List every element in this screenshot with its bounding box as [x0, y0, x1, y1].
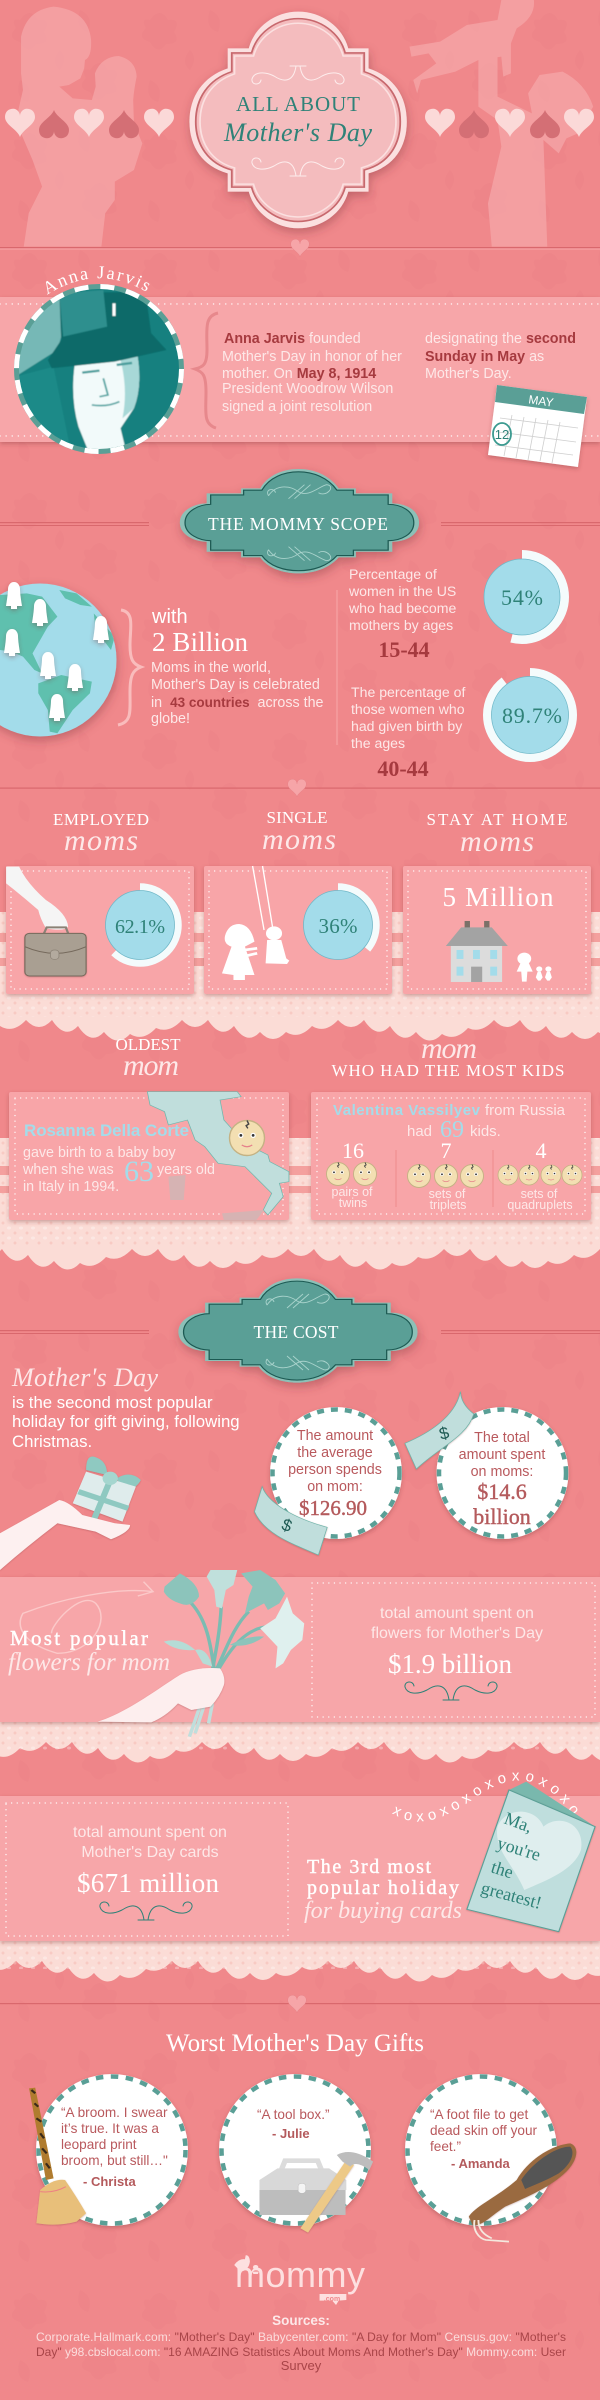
row of hearts right — [425, 109, 594, 138]
callout: amount average person spends: $126.90 — [299, 1496, 367, 1520]
heading: oldest mom: OLDEST — [116, 1035, 181, 1054]
stat: flowers spending: flowers for Mother's Day — [371, 1625, 543, 1642]
Anna Jarvis text: Mother's Day in honor of her — [222, 349, 402, 365]
panel: gift quote Amanda: feet.” — [430, 2139, 461, 2154]
callout: amount average person spends: person spends — [288, 1462, 382, 1478]
lace strip under cards band — [0, 1941, 600, 1982]
text: second most popular holiday: holiday for gift giving, following — [12, 1412, 240, 1431]
section banner: The Cost: THE COST — [254, 1322, 339, 1342]
text: Rosanna Della Corte: 63 — [124, 1155, 154, 1188]
panel: Anna Jarvis band — [0, 266, 600, 470]
text: most popular flowers for mom: Most popular — [10, 1626, 148, 1650]
stat: 54% mothers 15-44 — [348, 554, 564, 662]
text: Rosanna Della Corte: gave birth to a baby boy — [23, 1145, 176, 1161]
icon: dollar bill right — [405, 1392, 474, 1469]
chart: 36% ring — [300, 887, 376, 963]
decorative arrow — [20, 1582, 153, 1653]
heading: mom who had the most kids — [332, 1032, 564, 1080]
text: Valentina Vassilyev — [333, 1102, 566, 1143]
callout: total amount spent on moms: $14.6 — [477, 1479, 527, 1504]
column heading: single moms: moms — [262, 823, 336, 856]
text: Valentina Vassilyev: had — [407, 1123, 432, 1140]
icon: foot file — [469, 2143, 576, 2242]
panel: gift quote Amanda: - Amanda — [451, 2156, 511, 2171]
logo: mommy.com: .com — [324, 2296, 340, 2303]
panel: gift quote Amanda — [405, 2074, 576, 2242]
callout: amount average person spends: the average — [297, 1445, 373, 1461]
card message: greatest! — [479, 1878, 544, 1913]
panel: single moms card — [204, 866, 392, 994]
globe with mom pins — [0, 582, 116, 736]
stat: 89.7% mothers 40-44: those women who — [351, 701, 465, 717]
divider with heart — [0, 779, 600, 797]
icon: dollar bill left: $ — [279, 1515, 295, 1536]
stat: 89.7% mothers 40-44: 89.7% — [502, 703, 562, 728]
Anna Jarvis text — [222, 331, 576, 415]
calendar icon: 12 — [495, 427, 509, 442]
Anna Jarvis text: Mother's Day. — [425, 366, 512, 382]
icon: greeting card — [467, 1782, 595, 1932]
panel: gift quote Amanda: dead skin off your — [430, 2123, 538, 2138]
text: most popular flowers for mom — [8, 1626, 170, 1676]
text: Valentina Vassilyev: from Russia — [485, 1102, 566, 1119]
text: second most popular holiday: is the second most popular — [12, 1393, 213, 1412]
stat: 16 pairs of twins: twins — [339, 1196, 367, 1210]
stat: 4 sets of quadruplets: quadruplets — [507, 1198, 573, 1212]
xoxo arc: xoxoxoxoxoxoxoxoxo — [392, 1772, 578, 1822]
callout: total amount spent on moms: amount spent — [459, 1447, 545, 1463]
sources: Day" y98.cbslocal.com: "16 AMAZING Statistics About Moms And Mother's Day" Mommy.com: User — [36, 2345, 566, 2359]
panel: employed moms card: 62.1% — [115, 916, 165, 938]
column heading: stay at home moms: STAY AT HOME — [426, 810, 568, 829]
sources: Corporate.Hallmark.com: "Mother's Day" Babycenter.com: "A Day for Mom" Census.gov: "Mother's — [36, 2330, 566, 2344]
flourish bottom — [252, 158, 344, 176]
header: mother and baby silhouettes — [18, 0, 593, 247]
calendar icon: MAY — [528, 392, 554, 410]
icon: toolbox and hammer — [259, 2152, 373, 2233]
row of hearts left — [5, 109, 174, 138]
text: 2 billion moms: with — [151, 606, 188, 628]
stat: 7 sets of triplets: 7 — [440, 1138, 452, 1163]
text: second most popular holiday: Mother's Day — [11, 1363, 158, 1392]
stat: 54% mothers 15-44: Percentage of — [349, 566, 437, 582]
callout: total amount spent on moms: on moms: — [471, 1464, 533, 1480]
Anna Jarvis text: designating the second — [425, 331, 576, 347]
icon: dollar bill left — [254, 1487, 327, 1555]
stat: 4 sets of quadruplets: 4 — [536, 1138, 546, 1163]
heading: worst gifts: Worst Mother's Day Gifts — [166, 2030, 424, 2057]
stat: 16 pairs of twins — [326, 1138, 376, 1210]
column heading: single moms — [262, 808, 336, 856]
stat: cards spending: $671 million — [77, 1868, 220, 1898]
panel: popular flowers band — [0, 1570, 600, 1737]
icon: arm with briefcase — [6, 867, 86, 976]
panel: stay at home moms card — [403, 866, 591, 994]
stat: 7 sets of triplets — [408, 1138, 484, 1212]
stat: 89.7% mothers 40-44: the ages — [351, 735, 405, 751]
stat: flowers spending: $1.9 billion — [388, 1649, 512, 1679]
heading: mom who had the most kids: WHO HAD THE MOST KIDS — [332, 1061, 564, 1080]
stat: cards spending: Mother's Day cards — [81, 1844, 219, 1861]
stat: cards spending: total amount spent on — [73, 1824, 227, 1841]
stat: 7 sets of triplets: sets of — [429, 1187, 466, 1201]
text: Valentina Vassilyev: 69 — [440, 1117, 464, 1143]
panel: gift quote Christa: broom, but still…" — [61, 2153, 168, 2168]
Anna Jarvis text: President Woodrow Wilson — [222, 381, 393, 397]
callout: amount average person spends: on mom: — [307, 1479, 363, 1495]
panel: gift quote Christa: “A broom. I swear — [61, 2105, 168, 2120]
text: Rosanna Della Corte: when she was — [22, 1162, 114, 1178]
column heading: employed moms: moms — [64, 824, 138, 857]
panel: oldest mom card — [9, 1092, 289, 1220]
column heading: stay at home moms: moms — [460, 825, 534, 858]
panel: gift quote Christa: - Christa — [83, 2174, 136, 2189]
icon: house and family — [446, 921, 552, 982]
calendar icon — [488, 385, 587, 467]
title text: ALL ABOUT — [236, 92, 360, 116]
text: 3rd most popular holiday: The 3rd most — [307, 1856, 431, 1878]
text: second most popular holiday: Christmas. — [12, 1432, 92, 1451]
Anna Jarvis text: mother. On May 8, 1914 — [222, 366, 376, 382]
icon: baby face — [230, 1120, 264, 1156]
column heading: employed moms — [53, 810, 149, 857]
text: Rosanna Della Corte: years old — [157, 1162, 215, 1178]
stat: cards spending — [73, 1824, 227, 1920]
stat: 54% mothers 15-44: 54% — [501, 585, 543, 610]
icon: hand holding gift — [0, 1456, 141, 1570]
panel: gift quote Christa: it’s true. It was a — [61, 2121, 159, 2136]
logo: mommy.com: mommy — [235, 2254, 365, 2295]
brace right — [118, 610, 141, 725]
stat: 4 sets of quadruplets — [498, 1138, 582, 1212]
lace strip behind mom cards — [0, 912, 600, 1041]
title badge — [189, 12, 407, 228]
card message — [479, 1808, 544, 1913]
stat: flowers spending — [371, 1605, 543, 1700]
sources: Survey — [281, 2358, 322, 2373]
column heading: employed moms: EMPLOYED — [53, 810, 149, 829]
flourish top — [252, 66, 344, 84]
stat: 89.7% mothers 40-44 — [351, 672, 572, 781]
text: Rosanna Della Corte: in Italy in 1994. — [23, 1179, 119, 1195]
stat: 54% mothers 15-44: mothers by ages — [349, 617, 453, 633]
callout: amount average person spends — [270, 1407, 402, 1539]
sources: Sources: — [272, 2313, 330, 2328]
panel: gift quote Julie: - Julie — [272, 2126, 310, 2141]
stat: 16 pairs of twins: 16 — [342, 1138, 364, 1163]
stat: 89.7% mothers 40-44: had given birth by — [351, 718, 463, 734]
panel: most kids card — [311, 1092, 591, 1220]
text: Rosanna Della Corte: Rosanna Della Corte — [24, 1121, 189, 1140]
section banner: The Cost — [0, 1278, 600, 1383]
panel: gift quote Christa: leopard print — [61, 2137, 137, 2152]
text: Valentina Vassilyev: kids. — [470, 1123, 501, 1140]
title script: Mother's Day — [223, 118, 372, 147]
icon: dollar bill right: $ — [437, 1423, 452, 1444]
icon: mother pushing child on swing — [222, 866, 289, 980]
stat: 89.7% mothers 40-44: The percentage of — [351, 684, 465, 700]
panel: gift quote Julie — [219, 2074, 373, 2233]
text: second most popular holiday — [11, 1363, 240, 1451]
stat: 7 sets of triplets: triplets — [430, 1198, 466, 1212]
card message: the — [489, 1857, 516, 1882]
map of Italy — [147, 1092, 289, 1220]
sources — [36, 2313, 566, 2373]
divider with heart — [0, 1995, 600, 2013]
text: 2 billion moms: in 43 countries across the — [151, 695, 324, 711]
panel: single moms card: 36% — [318, 914, 358, 938]
arc name Anna Jarvis: Anna Jarvis — [46, 266, 150, 295]
text: 3rd most popular holiday — [304, 1856, 462, 1924]
panel: employed moms card — [6, 866, 194, 994]
text: most popular flowers for mom: flowers for mom — [8, 1649, 170, 1676]
card message: you're — [495, 1833, 543, 1865]
card message: Ma, — [502, 1808, 535, 1837]
panel: gift quote Amanda: “A foot file to get — [430, 2107, 528, 2122]
stat: 5 Million: 5 Million — [442, 882, 554, 912]
stat: 16 pairs of twins: pairs of — [332, 1185, 373, 1199]
panel: gift quote Christa — [29, 2074, 188, 2226]
lace strip behind oldest mom cards — [0, 1138, 600, 1270]
stat: 89.7% mothers 40-44: 40-44 — [377, 756, 429, 781]
heading: oldest mom: mom — [123, 1049, 179, 1082]
icon: leopard broom — [29, 2088, 86, 2225]
stat: 54% mothers 15-44: women in the US — [348, 583, 456, 599]
lace strip under flowers band — [0, 1722, 600, 1763]
heading: mom who had the most kids: mom — [421, 1032, 477, 1065]
callout: total amount spent on moms — [436, 1407, 568, 1539]
curly brace — [195, 313, 218, 428]
text: 2 billion moms: 2 Billion — [152, 627, 248, 657]
section banner: The Mommy Scope: THE MOMMY SCOPE — [208, 514, 388, 534]
text: 3rd most popular holiday: for buying cards — [304, 1898, 462, 1924]
callout: amount average person spends: The amount — [297, 1428, 373, 1444]
section banner: The Mommy Scope — [0, 469, 600, 573]
text: 2 billion moms: globe! — [151, 711, 190, 727]
divider with heart — [0, 239, 600, 257]
icon: bouquet in hand — [98, 1570, 304, 1737]
column heading: stay at home moms — [426, 810, 568, 858]
portrait — [15, 283, 188, 460]
panel: gift quote Julie: “A tool box.” — [257, 2107, 330, 2122]
Anna Jarvis text: Anna Jarvis founded — [224, 331, 361, 347]
stat: 54% mothers 15-44: who had become — [348, 600, 457, 616]
callout: total amount spent on moms: The total — [474, 1430, 530, 1446]
heading: oldest mom — [116, 1035, 181, 1082]
chart: 62.1% ring — [102, 887, 178, 963]
text: 3rd most popular holiday: popular holiday — [307, 1877, 459, 1899]
text: 2 billion moms: Mother's Day is celebrated — [151, 677, 320, 693]
Anna Jarvis text: Sunday in May as — [425, 349, 544, 365]
text: Rosanna Della Corte — [22, 1121, 215, 1195]
vertical divider — [336, 590, 338, 745]
stat: 4 sets of quadruplets: sets of — [521, 1187, 558, 1201]
text: Valentina Vassilyev: Valentina Vassilyev — [333, 1102, 481, 1119]
column heading: single moms: SINGLE — [266, 808, 328, 827]
Anna Jarvis text: signed a joint resolution — [222, 399, 372, 415]
text: 2 billion moms — [151, 606, 324, 727]
stat: 54% mothers 15-44: 15-44 — [378, 637, 430, 662]
stat: flowers spending: total amount spent on — [380, 1605, 534, 1622]
text: 2 billion moms: Moms in the world, — [151, 660, 271, 676]
callout: total amount spent on moms: billion — [473, 1504, 531, 1529]
